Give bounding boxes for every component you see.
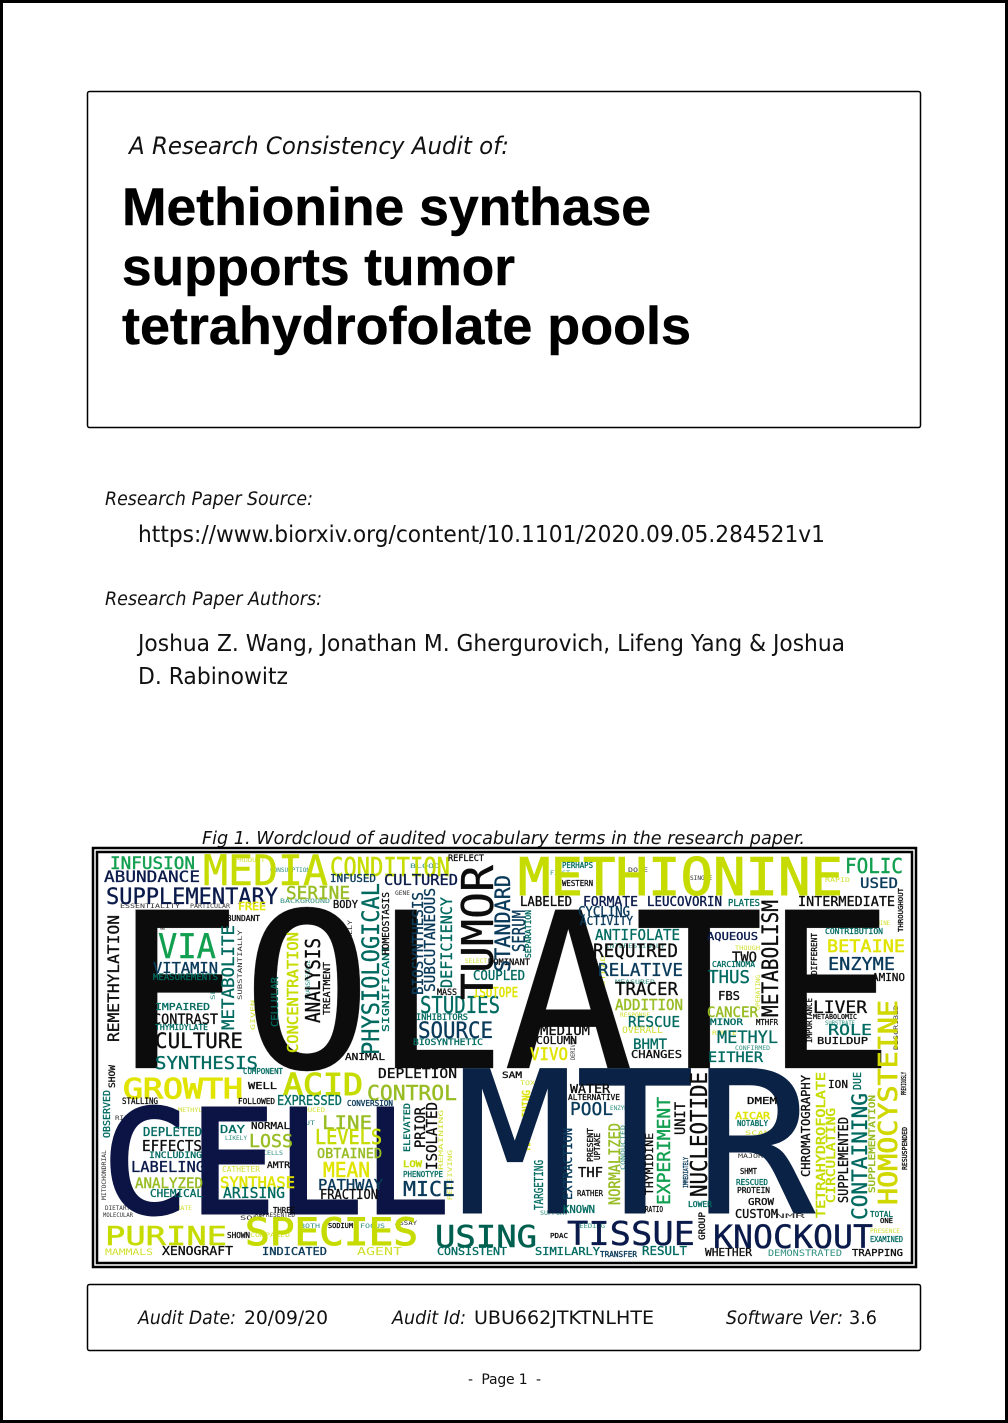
medium words across top half: AMINO xyxy=(872,971,905,984)
vertical words: PHYSIOLOGICAL xyxy=(357,883,385,1055)
medium words across bottom half: SHOWN xyxy=(227,1231,250,1240)
medium words across top half: PERHAPS xyxy=(562,861,593,870)
medium words across bottom half: PATHWAY xyxy=(318,1176,383,1194)
small background words: DESCRIBED xyxy=(893,1004,900,1050)
vertical words: GROUP xyxy=(698,1211,708,1240)
medium words across bottom half: LEVELS xyxy=(315,1125,382,1149)
medium words across top half: BHMT xyxy=(633,1037,668,1053)
medium words across top half: REFLECT xyxy=(448,854,485,864)
small background words: FIRST xyxy=(550,870,570,877)
audit date: 20/09/20 xyxy=(244,1307,328,1329)
medium words across top half: THYMIDYLATE xyxy=(155,1023,208,1032)
medium words across top half: FOLIC xyxy=(845,854,903,878)
heading: tetrahydrofolate pools xyxy=(122,297,691,356)
medium words across top half: OVERALL xyxy=(622,1026,663,1036)
medium words across bottom half: MEAN xyxy=(323,1158,370,1182)
vertical words: BIOSYNTHESIS xyxy=(409,892,427,995)
medium words across bottom half: DMEM xyxy=(747,1096,777,1107)
medium words across bottom half: AGENT xyxy=(357,1245,402,1258)
medium words across bottom half: PROTEIN xyxy=(737,1186,770,1195)
medium words across bottom half: DAY xyxy=(220,1123,245,1136)
research paper authors: Research Paper Authors: xyxy=(105,588,322,610)
medium words across bottom half: THREE xyxy=(273,1206,295,1215)
vertical words: EXTRACTION xyxy=(561,1128,575,1200)
figure caption: Fig 1. Wordcloud of audited vocabulary terms in the research paper. xyxy=(202,828,805,849)
medium words across top half: METHYL xyxy=(717,1028,778,1048)
medium words across top half: VIA xyxy=(158,927,216,967)
small background words: RATE xyxy=(160,909,167,930)
small background words: ROUTE xyxy=(712,1030,738,1037)
small background words: REPRESENTED xyxy=(255,1212,295,1219)
medium words across top half: BIOSYNTHETIC xyxy=(413,1038,483,1048)
medium words across top half: RELATIVE xyxy=(598,960,683,981)
medium words across top half xyxy=(104,846,905,1074)
medium words across top half: CYCLING xyxy=(578,905,630,920)
medium words across bottom half: LABELING xyxy=(131,1158,205,1176)
vertical words: SERUM xyxy=(509,910,530,952)
medium words across bottom half: WELL xyxy=(248,1081,277,1092)
medium words across top half: ABUNDANCE xyxy=(104,867,200,886)
medium words across bottom half: KNOWN xyxy=(563,1203,595,1216)
medium words across top half: SYNTHESIS xyxy=(155,1053,258,1074)
medium words across bottom half: SIMILARLY xyxy=(535,1245,600,1258)
vertical words: OBSERVED xyxy=(102,1090,113,1138)
small background words: PARTICULAR xyxy=(190,903,230,910)
audit date xyxy=(136,1307,328,1329)
medium words across top half: FBS xyxy=(718,989,740,1003)
small background words: PUT xyxy=(300,1120,316,1127)
small background words: NMR xyxy=(775,1213,806,1220)
medium words across top half: CANCER xyxy=(707,1005,759,1021)
research paper authors: D. Rabinowitz xyxy=(138,664,288,690)
medium words across bottom half: LINE xyxy=(322,1112,372,1134)
small background words: SUBSTRATE xyxy=(825,1020,855,1027)
medium words across top half: LEUCOVORIN xyxy=(647,895,722,910)
medium words across top half: MASS xyxy=(437,988,457,998)
small background words: METHYLATION xyxy=(178,1107,223,1114)
medium words across top half: ISOTOPE xyxy=(473,986,518,1001)
medium words across bottom half: FRACTION xyxy=(320,1188,378,1203)
vertical words xyxy=(102,864,909,1240)
medium words across top half: USED xyxy=(860,876,898,892)
medium words across top half: ANTIFOLATE xyxy=(595,926,680,944)
medium words across bottom half: WHETHER xyxy=(705,1246,752,1259)
audit id: UBU662JTKTNLHTE xyxy=(474,1307,654,1329)
medium words across bottom half: RATIO xyxy=(645,1205,663,1214)
small background words: ESSENTIALITY xyxy=(120,903,181,910)
small background words: PROLIFERATE xyxy=(150,1205,192,1212)
medium words across bottom half: ANALYZED xyxy=(135,1176,203,1192)
research paper source: Research Paper Source: xyxy=(105,488,313,510)
research paper source: https://www.biorxiv.org/content/10.1101/2020.09.05.284521v1 xyxy=(138,522,825,548)
medium words across top half: CHANGES xyxy=(631,1048,682,1061)
medium words across bottom half: EFFECTS xyxy=(142,1137,202,1155)
medium words across bottom half: CATHETER xyxy=(222,1165,260,1174)
medium words across bottom half: COMPONENT xyxy=(243,1067,283,1076)
vertical words: SUBCUTANEOUS xyxy=(421,888,439,992)
medium words across top half: INTERMEDIATE xyxy=(798,895,895,910)
small background words: LIKELY xyxy=(225,1135,247,1142)
medium words across top half: AQUEOUS xyxy=(707,930,758,943)
subtitle: A Research Consistency Audit of: xyxy=(127,132,509,160)
small background words: INTERESTINGLY xyxy=(605,943,665,950)
medium words across top half: MEASUREMENTS xyxy=(153,973,218,983)
medium words across bottom half: POOL xyxy=(570,1099,613,1120)
word: CELL: CELL xyxy=(102,1079,450,1247)
medium words across top half: SERINE xyxy=(286,883,350,904)
vertical words: THYMIDINE xyxy=(643,1133,656,1195)
panel: title box xyxy=(88,92,920,428)
vertical words: METABOLITE xyxy=(219,925,239,1030)
software version: 3.6 xyxy=(849,1307,877,1329)
small background words: CONFIRMED xyxy=(735,1045,770,1052)
software version: Software Ver: xyxy=(726,1307,843,1329)
audit id xyxy=(390,1307,654,1329)
vertical words: CIRCULATING xyxy=(824,1108,838,1203)
small background words: THOUGH xyxy=(735,945,760,952)
medium words across top half: SOURCE xyxy=(418,1019,493,1044)
small background words: ASSAY xyxy=(395,1220,417,1227)
medium words across bottom half: MAMMALS xyxy=(105,1248,153,1258)
medium words across bottom half: MICE xyxy=(403,1177,455,1201)
small background words: CLONALLY xyxy=(347,919,354,960)
medium words across top half: INFUSION xyxy=(110,854,195,874)
vertical words: RESUSPENDED xyxy=(901,1127,909,1170)
small background words: RISK xyxy=(115,1115,133,1122)
medium words across top half: MEDIA xyxy=(203,846,328,895)
medium words across bottom half: CHEMICAL xyxy=(150,1187,203,1200)
medium words across top half: COUPLED xyxy=(473,969,525,984)
vertical words: REMETHYLATION xyxy=(104,915,123,1042)
vertical words: CELLULAR xyxy=(270,976,281,1027)
medium words across top half: VIVO xyxy=(530,1045,568,1065)
small background words: TOXIC xyxy=(520,1080,546,1087)
medium words across bottom half: WATER xyxy=(570,1082,611,1096)
medium words across top half: TRACER xyxy=(615,979,678,1000)
small background words: CELLS xyxy=(263,1150,283,1157)
medium words across top half: MINOR xyxy=(710,1018,744,1028)
medium words across bottom half: GROWTH xyxy=(123,1072,243,1105)
medium words across bottom half: AICAR xyxy=(735,1111,771,1122)
medium words across top half: MEDIUM xyxy=(540,1024,590,1039)
small background words: INSTEAD xyxy=(600,954,607,1000)
medium words across bottom half: TISSUE xyxy=(567,1214,695,1253)
page number: - Page 1 - xyxy=(468,1372,541,1388)
small background words: ENZYMES xyxy=(610,1105,635,1112)
medium words across bottom half: ACID xyxy=(283,1068,363,1103)
medium words across bottom half: CONTROL xyxy=(367,1081,457,1105)
medium words across bottom half: GROW xyxy=(748,1197,775,1208)
medium words across bottom half: EXPRESSED xyxy=(277,1094,342,1109)
small background words: MAINTAINING xyxy=(520,1090,533,1150)
medium words across top half: CONDITION xyxy=(330,853,450,883)
small background words: FOCUS xyxy=(360,1223,386,1230)
medium words across top half: PLATES xyxy=(728,898,760,909)
medium words across top half: CULTURED xyxy=(384,871,458,889)
medium words across top half: BUILDUP xyxy=(817,1036,868,1047)
medium words across top half: WESTERN xyxy=(562,879,593,888)
small background words: RAPID xyxy=(825,877,851,884)
small background words: BLOOD xyxy=(410,863,441,870)
small background words: PRESENCE xyxy=(870,1228,900,1235)
vertical words: SHOW xyxy=(108,1064,118,1088)
medium words across top half: ABUNDANT xyxy=(222,914,260,923)
vertical words: HOMOCYSTEINE xyxy=(874,1000,904,1205)
medium words across top half: METABOLOMIC xyxy=(813,1013,857,1021)
medium words across top half: CONTRAST xyxy=(153,1012,219,1028)
medium words across top half: CONTRIBUTION xyxy=(825,927,883,936)
medium words across bottom half: TRAPPING xyxy=(852,1248,903,1259)
heading: Methionine synthase xyxy=(122,178,651,237)
small background words: SUPPORT xyxy=(540,1210,568,1217)
wordcloud figure xyxy=(93,846,916,1267)
small background words: DOSE xyxy=(628,867,649,874)
small background words: SINGLE xyxy=(690,875,712,882)
medium words across bottom half: CUSTOM xyxy=(735,1207,778,1221)
medium words across top half: CULTURE xyxy=(155,1029,243,1053)
medium words across bottom half: KNOCKOUT xyxy=(713,1218,873,1256)
small background words: TRANSFERASE xyxy=(305,960,312,1000)
small background words: CONDUCTED xyxy=(620,1124,627,1170)
medium words across top half: LABELED xyxy=(520,895,572,910)
medium words across bottom half: SHMT xyxy=(740,1167,757,1176)
word: FOLATE: FOLATE xyxy=(111,868,895,1120)
medium words across bottom half: PDAC xyxy=(550,1232,568,1240)
vertical words: ISOLATED xyxy=(423,1102,441,1170)
small background words: REMAINING xyxy=(438,1109,445,1170)
small background words: CONSUMPTION xyxy=(270,867,310,874)
small background words: GENE xyxy=(395,890,410,897)
medium words across top half: LIVER xyxy=(813,998,868,1018)
medium words across bottom half: CONVERSION xyxy=(347,1099,393,1108)
small background words xyxy=(101,857,900,1239)
vertical words: STANDARD xyxy=(491,875,515,972)
small background words: COMPARED xyxy=(250,1232,291,1239)
medium words across top half: COLUMN xyxy=(536,1034,577,1047)
medium words across bottom half: PHENOTYPE xyxy=(403,1170,443,1179)
vertical words: UPTAKE xyxy=(593,1133,602,1160)
medium words across bottom half: OBTAINED xyxy=(317,1147,382,1162)
medium words across top half: ADDITION xyxy=(615,996,683,1014)
vertical words: DIFFERENT xyxy=(810,933,819,975)
medium words across top half: CARCINOMA xyxy=(712,960,755,969)
vertical words: SEPARATION xyxy=(524,910,533,958)
vertical words: CONCENTRATION xyxy=(284,932,302,1053)
research paper authors xyxy=(105,588,845,690)
vertical words: UNIT xyxy=(673,1101,689,1135)
audit date: Audit Date: xyxy=(136,1307,236,1329)
audit id: Audit Id: xyxy=(390,1307,466,1329)
medium words across top half: BODY xyxy=(333,898,358,911)
medium words across top half: SUPPLEMENTARY xyxy=(106,885,278,910)
medium words across top half: METHIONINE xyxy=(518,848,843,908)
medium words across bottom half: THF xyxy=(578,1166,603,1181)
medium words across bottom half: TRANSFER xyxy=(600,1250,637,1259)
heading xyxy=(122,178,691,356)
vertical words: ELEVATED xyxy=(403,1103,413,1152)
small background words: DIETARY xyxy=(105,1205,130,1212)
small background words: SUBSTANTIALLY xyxy=(237,929,244,1000)
medium words across top half: EITHER xyxy=(708,1050,764,1066)
small background words: SCAN xyxy=(745,1130,771,1137)
vertical words: NORMALIZED xyxy=(605,1123,624,1205)
medium words across top half: ENZYME xyxy=(828,954,895,975)
vertical words: ANALYSIS xyxy=(301,938,325,1023)
small background words: BACKGROUND xyxy=(280,898,331,905)
medium words across top half: STUDIES xyxy=(420,993,500,1019)
vertical words: TETRAHYDROFOLATE xyxy=(814,1072,828,1218)
small background words: OPERATING xyxy=(755,975,762,1010)
medium words across bottom half: LOSS xyxy=(249,1131,293,1152)
medium words across bottom half: USING xyxy=(435,1220,537,1255)
small background words: SEEN xyxy=(210,977,217,1000)
medium words across top half: VITAMIN xyxy=(153,959,218,977)
vertical words: METABOLISM xyxy=(759,900,784,1017)
medium words across bottom half: NORMAL xyxy=(251,1121,290,1132)
medium words across bottom half: SPECIES xyxy=(245,1211,418,1254)
vertical words: CONTAINING xyxy=(848,1093,872,1220)
small background words: MITOCHONDRIAL xyxy=(101,1150,108,1200)
vertical words: SUPPLEMENTED xyxy=(837,1117,852,1203)
research paper authors: Joshua Z. Wang, Jonathan M. Ghergurovich, Lifeng Yang & Joshua xyxy=(136,631,845,657)
small background words: ARCHITECTURE xyxy=(340,979,347,1040)
vertical words: EXPERIMENT xyxy=(654,1097,675,1205)
small background words: MAJOR xyxy=(738,1153,764,1160)
medium words across bottom half: FOLLOWED xyxy=(238,1097,275,1106)
medium words across top half: THUS xyxy=(708,967,750,988)
vertical words: HOMEOSTASIS xyxy=(381,892,392,955)
medium words across top half: ACTIVITY xyxy=(580,914,634,928)
medium words across bottom half: SAM xyxy=(502,1071,523,1081)
medium words across bottom half xyxy=(105,1067,903,1259)
medium words across top half: INHIBITORS xyxy=(416,1013,468,1023)
vertical words: SUPPLEMENTATION xyxy=(868,1095,878,1193)
medium words across bottom half: INDICATED xyxy=(262,1245,327,1258)
medium words across bottom half: DEPLETED xyxy=(143,1125,202,1139)
medium words across bottom half: ALTERNATIVE xyxy=(568,1093,620,1102)
medium words across bottom half: DEMONSTRATED xyxy=(768,1249,842,1259)
medium words across top half: ROLE xyxy=(828,1021,872,1039)
small background words: SELECT xyxy=(465,958,487,965)
panel: audit footer xyxy=(88,1284,920,1350)
small background words: DERIVED xyxy=(570,1038,577,1060)
medium words across bottom half: STALLING xyxy=(122,1097,158,1107)
small background words: SOLE xyxy=(240,1215,266,1222)
small background words: ISOFORM xyxy=(835,985,865,992)
small background words: BOTH xyxy=(300,1223,321,1230)
small background words: NITROGEN xyxy=(695,959,702,1000)
vertical words: CHROMATOGRAPHY xyxy=(799,1074,813,1177)
medium words across top half: FORMATE xyxy=(583,895,638,910)
medium words across top half: BETAINE xyxy=(827,937,905,957)
medium words across top half: INFUSED xyxy=(330,872,376,885)
medium words across bottom half: RESULT xyxy=(642,1244,687,1258)
vertical words: SIGNIFICANT xyxy=(381,945,392,1032)
medium words across bottom half: XENOGRAFT xyxy=(162,1244,233,1258)
small background words: RECEIVING xyxy=(447,1149,454,1200)
medium words across bottom half: CONSISTENT xyxy=(437,1245,507,1258)
small background words: MOLECULAR xyxy=(103,1212,133,1219)
medium words across bottom half: ARISING xyxy=(223,1184,285,1202)
medium words across top half: ANIMAL xyxy=(345,1052,385,1063)
medium words across bottom half: LOW xyxy=(403,1160,423,1170)
medium words across top half: FREE xyxy=(238,900,266,913)
vertical words: IMPORTANCE xyxy=(805,998,814,1043)
research paper source xyxy=(105,488,825,548)
medium words across bottom half: RATHER xyxy=(577,1189,603,1198)
small background words: RESPONSE xyxy=(620,1012,650,1019)
vertical words: DUE xyxy=(851,1072,864,1090)
medium words across top half: RESCUE xyxy=(628,1013,680,1031)
vertical words: IMMEDIATELY xyxy=(682,1156,690,1188)
vertical words: PRESENT xyxy=(586,1128,595,1162)
medium words across bottom half: DEPLETION xyxy=(378,1067,457,1082)
medium words across bottom half: LOWER xyxy=(688,1200,712,1209)
vertical words: TREATMENT xyxy=(322,962,333,1015)
medium words across top half: IMPAIRED xyxy=(155,1002,210,1013)
medium words across top half: TWO xyxy=(732,950,757,966)
small background words: PRODUCT xyxy=(235,857,265,864)
medium words across bottom half: SODIUM xyxy=(328,1222,353,1230)
medium words across bottom half: AMTR xyxy=(267,1161,291,1171)
small background words: REDUCED xyxy=(295,1107,325,1114)
small background words: FEEDING xyxy=(575,1223,605,1230)
medium words across top half: REQUIRED xyxy=(593,940,678,962)
small background words: GIVEN xyxy=(250,999,257,1030)
medium words across bottom half: RESCUED xyxy=(736,1178,768,1187)
small background words: SAMPLE xyxy=(520,1029,527,1060)
medium words across bottom half: SYNTHASE xyxy=(220,1173,295,1192)
medium words across bottom half: ONE xyxy=(880,1217,893,1225)
small background words: HYPOXANTHINE xyxy=(850,920,890,927)
vertical words: PREVIOUSLY xyxy=(900,1072,908,1095)
heading: supports tumor xyxy=(122,238,515,297)
medium words across bottom half: EXAMINED xyxy=(870,1235,903,1244)
vertical words: TUMOR xyxy=(453,864,504,1000)
medium words across bottom half: TOTAL xyxy=(870,1210,893,1219)
vertical words: NUCLEOTIDE xyxy=(687,1072,713,1197)
vertical words: PRIOR xyxy=(413,1106,429,1148)
vertical words: DEFICIENCY xyxy=(437,897,456,988)
word: MTR: MTR xyxy=(455,1029,816,1260)
medium words across top half: MTHFR xyxy=(756,1018,778,1027)
medium words across bottom half: INCLUDING xyxy=(149,1151,202,1161)
medium words across bottom half: ION xyxy=(828,1078,848,1091)
medium words across bottom half: PURINE xyxy=(105,1222,227,1252)
small background words: MEASURED xyxy=(615,979,656,986)
medium words across bottom half: NOTABLY xyxy=(737,1119,768,1128)
medium words across top half: DOMINANT xyxy=(488,958,531,968)
vertical words: THROUGHOUT xyxy=(897,887,905,932)
vertical words: TARGETING xyxy=(532,1160,546,1210)
small background words: AGILENT xyxy=(740,1080,770,1087)
